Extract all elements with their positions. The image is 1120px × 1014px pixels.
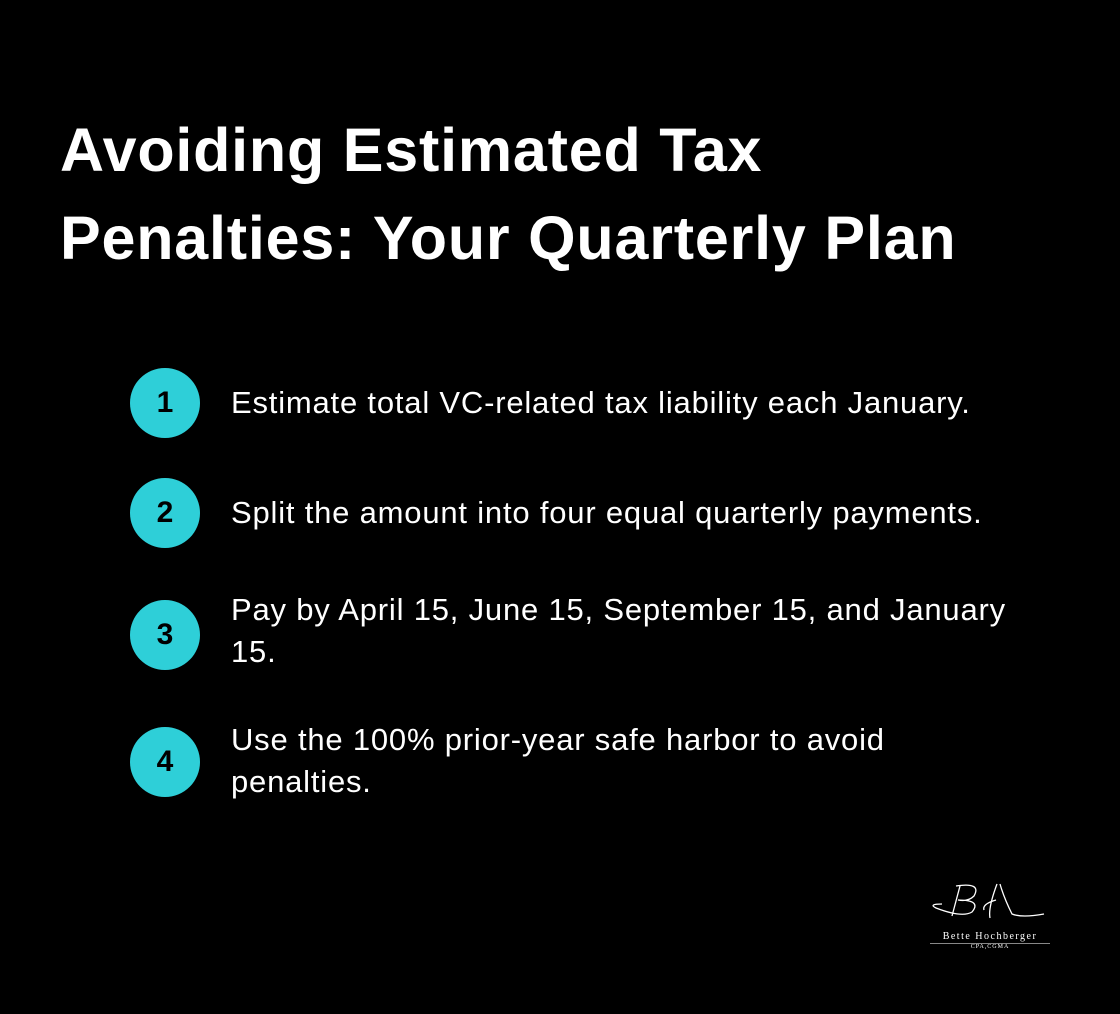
badge 4: [130, 727, 200, 797]
step 4: [130, 722, 885, 799]
text 4: Use the 100% prior-year safe harbor to avoid penalties.: [231, 722, 885, 799]
badge 3: 3: [157, 618, 173, 651]
logo: [930, 884, 1050, 950]
badge 1: [130, 368, 200, 438]
logo: Bette Hochberger: [943, 931, 1037, 942]
step 3: [130, 592, 1006, 670]
step 1: [130, 368, 971, 438]
text 1: Estimate total VC-related tax liability each January.: [231, 385, 971, 420]
title: [60, 116, 956, 272]
text 2: Split the amount into four equal quarterly payments.: [231, 495, 983, 530]
badge 3: [130, 600, 200, 670]
badge 2: 2: [157, 496, 173, 529]
step 2: [130, 478, 983, 548]
logo: CPA,CGMA: [971, 944, 1009, 950]
badge 4: 4: [157, 745, 173, 778]
title: Penalties: Your Quarterly Plan: [60, 204, 956, 272]
title: Avoiding Estimated Tax: [60, 116, 762, 184]
badge 2: [130, 478, 200, 548]
text 3: Pay by April 15, June 15, September 15, and January 15.: [231, 592, 1006, 669]
badge 1: 1: [157, 386, 173, 419]
